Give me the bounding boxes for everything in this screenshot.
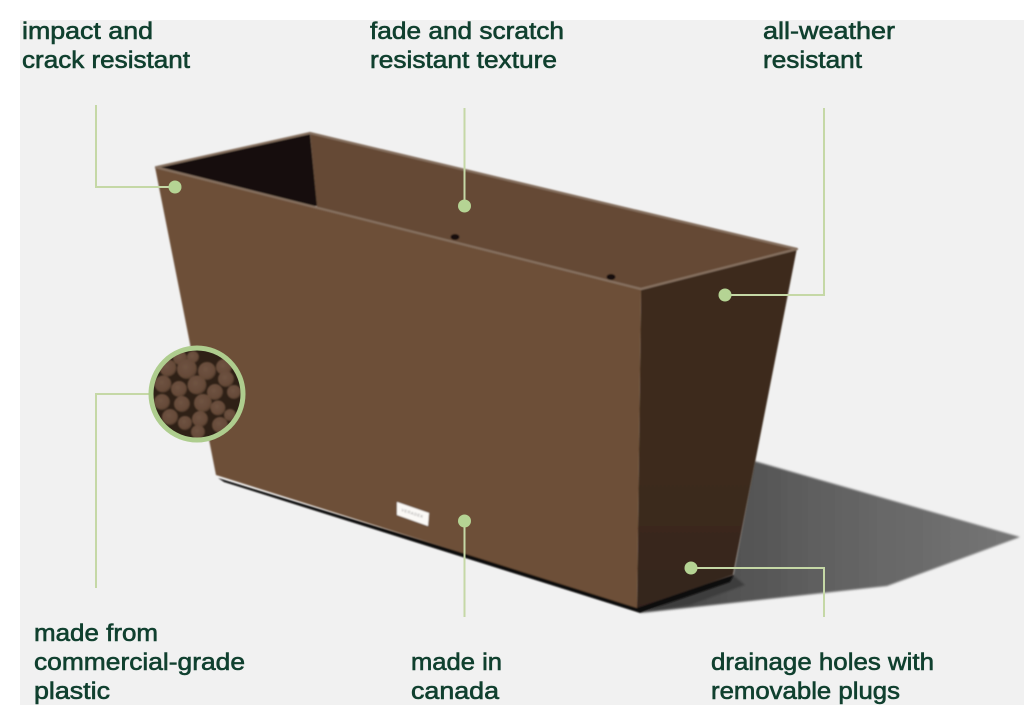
leader: made from commercial-grade plastic [96,394,150,588]
label: made from commercial-grade plastic: made from [34,620,158,647]
label: fade and scratch resistant texture: resistant texture [370,47,557,74]
label: fade and scratch resistant texture: fade and scratch [370,18,564,45]
drop shadow [640,461,1020,613]
label: drainage holes with removable plugs: removable plugs [711,678,900,705]
leader: made in canada [458,514,471,617]
brand tag [397,502,429,526]
planter side face [637,248,797,608]
label: made in canada: made in [411,649,502,676]
leader: fade and scratch resistant texture [458,108,471,212]
magnified plastic pellets [151,348,243,440]
label: made from commercial-grade plastic: plastic [34,678,110,705]
label: made from commercial-grade plastic: commercial-grade [34,649,245,676]
label: impact and crack resistant: crack resistant [22,47,190,74]
planter rim [155,133,797,289]
planter [155,133,797,613]
leader: impact and crack resistant [96,105,182,194]
label: made in canada: canada [411,678,500,705]
label: impact and crack resistant: impact and [22,18,153,45]
planter front face [155,167,641,608]
label: all-weather resistant: all-weather [763,18,895,45]
fixing marks [450,234,616,280]
label: all-weather resistant: resistant [763,47,862,74]
leader: all-weather resistant [718,108,824,302]
leader: drainage holes [684,562,824,617]
planter inner dark corner [157,134,317,206]
planter base shadow line [218,478,734,613]
planter back wall [310,133,797,290]
brand tag: VERADEK [401,507,424,519]
label: drainage holes with removable plugs: drainage holes with [711,649,934,676]
